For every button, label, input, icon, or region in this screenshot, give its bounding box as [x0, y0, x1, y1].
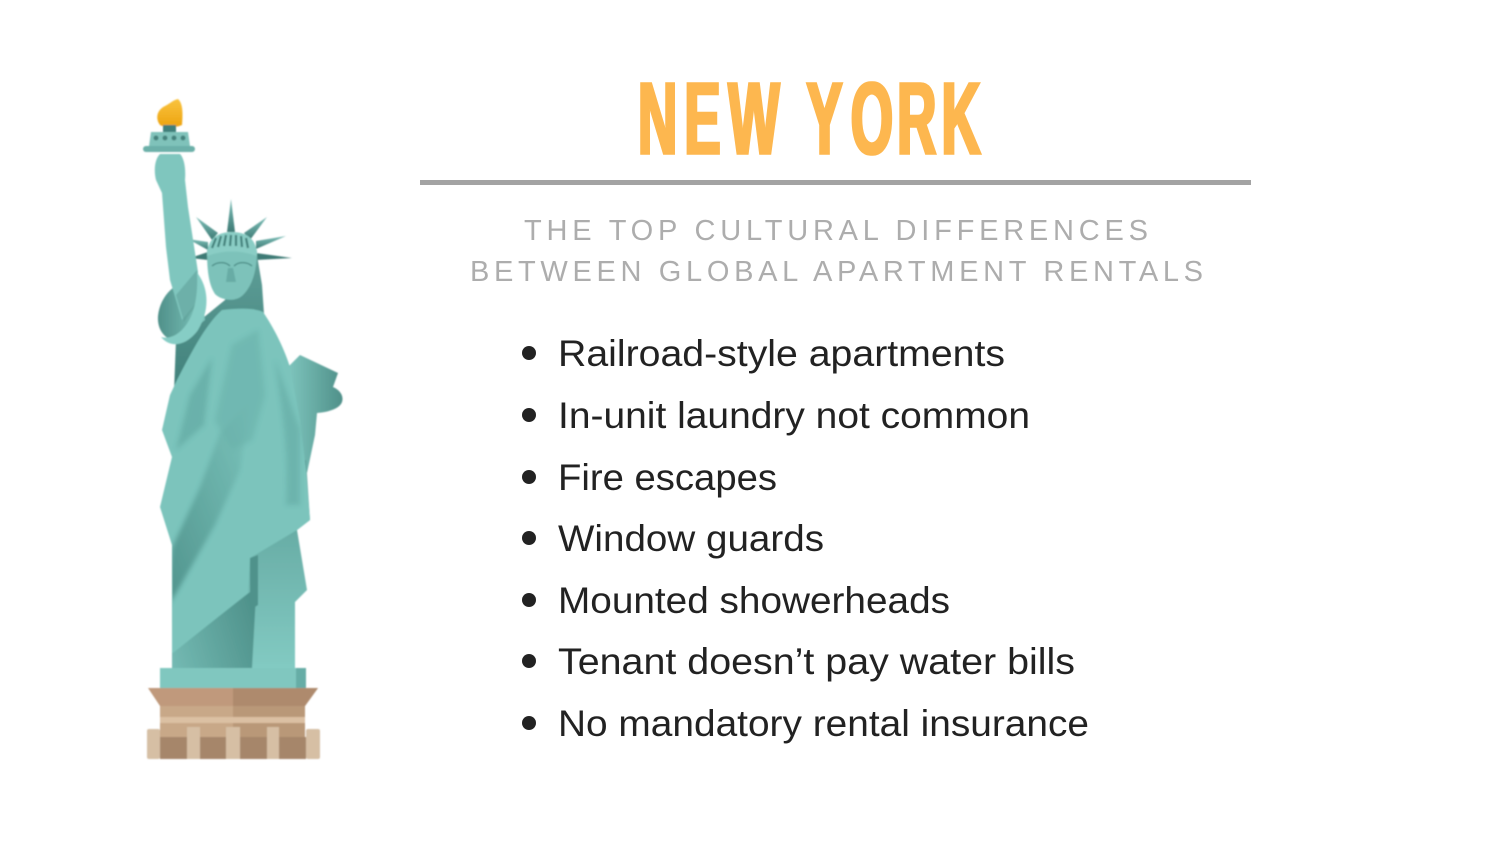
- item 5: Mounted showerheads: [558, 580, 950, 621]
- sleeve band: [161, 272, 206, 344]
- robe main drape: [160, 309, 310, 653]
- sleeve interior: [158, 277, 205, 342]
- subtitle: BETWEEN GLOBAL APARTMENT RENTALS: [470, 256, 1203, 288]
- subtitle: [470, 215, 1203, 288]
- item 1: Railroad-style apartments: [558, 333, 1005, 374]
- subtitle: THE TOP CULTURAL DIFFERENCES: [524, 215, 1148, 247]
- plinth: [160, 668, 306, 688]
- neck and head: [207, 232, 257, 300]
- torch platform: [143, 125, 195, 152]
- torch flame: [157, 99, 183, 127]
- item 3: Fire escapes: [558, 457, 777, 498]
- divider rule: [420, 180, 1251, 185]
- item 6: Tenant doesn’t pay water bills: [558, 641, 1075, 682]
- back of body and hair: [174, 255, 264, 392]
- raised arm: [155, 154, 198, 320]
- item 4: Window guards: [558, 518, 824, 559]
- item 2: In-unit laundry not common: [558, 395, 1030, 436]
- crown spikes: [188, 199, 292, 260]
- pedestal: [147, 688, 320, 759]
- bullet list: [522, 333, 1089, 744]
- title: NEW YORK: [638, 61, 981, 177]
- robe folds: [165, 330, 300, 610]
- item 7: No mandatory rental insurance: [558, 703, 1089, 744]
- book: [287, 355, 343, 473]
- robe lower: [172, 460, 310, 668]
- icon: Statue of Liberty: [143, 99, 343, 759]
